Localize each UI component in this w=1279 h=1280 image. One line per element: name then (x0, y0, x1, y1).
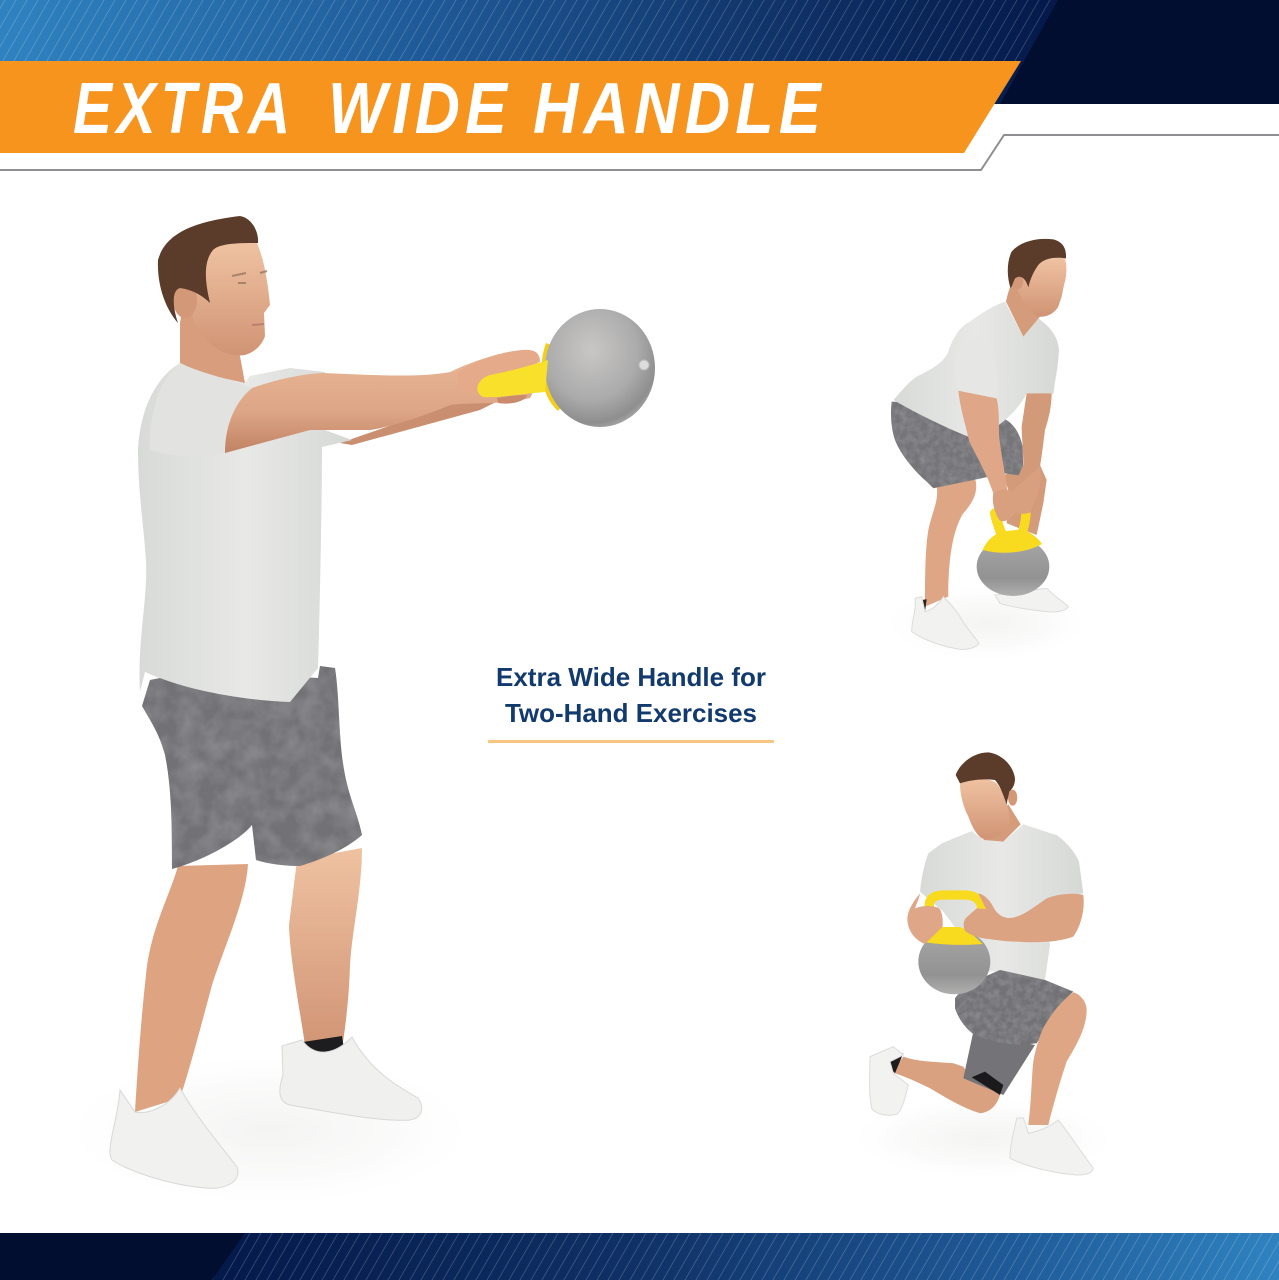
hair (956, 752, 1015, 804)
title: HANDLE (533, 69, 826, 149)
shorts (955, 970, 1073, 1045)
title (73, 69, 826, 149)
shorts (891, 402, 1023, 488)
ear (1008, 790, 1017, 806)
orange title band (0, 61, 1021, 153)
navy header bar (0, 0, 1279, 104)
sock (890, 1053, 903, 1073)
right handle post (1022, 514, 1026, 534)
left handle post (995, 513, 1004, 538)
shorts (142, 666, 362, 869)
gripping fingers (458, 350, 540, 395)
yellow dome (926, 927, 983, 945)
front shoe (912, 597, 979, 649)
photo: man swinging kettlebell (55, 216, 655, 1210)
valve (639, 360, 649, 370)
head (960, 779, 1010, 839)
back leg (895, 1057, 1000, 1113)
back shoe (280, 1037, 422, 1120)
caption line 2: Two-Hand Exercises (505, 698, 757, 728)
yellow dome (983, 529, 1042, 553)
torso shirt (138, 363, 352, 702)
head (190, 243, 270, 355)
kettlebell (477, 309, 655, 427)
lower shorts (963, 1032, 1035, 1095)
photo: squat with kettlebell (880, 239, 1093, 663)
hair (1008, 239, 1066, 288)
floor shadow (55, 1050, 485, 1210)
shirt (920, 824, 1083, 980)
back sock (303, 1036, 345, 1062)
black liner (972, 1072, 1003, 1095)
kettlebell (918, 895, 990, 994)
shirt sleeve (150, 363, 252, 456)
hands (993, 467, 1041, 521)
sock (921, 599, 927, 612)
white gap below bar (0, 104, 1279, 134)
header banner (0, 0, 1279, 170)
caption underline (488, 740, 774, 743)
back arm (340, 398, 500, 445)
front arm (958, 391, 1017, 521)
front shoe (110, 1088, 238, 1188)
ear (173, 282, 197, 318)
back leg (289, 848, 362, 1052)
right arm and hand (964, 893, 1084, 942)
neck (180, 298, 245, 383)
floor shadow (880, 583, 1093, 663)
handle (929, 895, 982, 909)
head (1017, 258, 1066, 317)
back shoe (995, 588, 1068, 612)
neck (1006, 280, 1040, 337)
front leg (925, 478, 976, 607)
back leg (1003, 465, 1047, 535)
front arm (225, 350, 538, 453)
neck (983, 804, 1021, 842)
back shoe (870, 1047, 908, 1115)
front leg (1028, 992, 1087, 1125)
title: WIDE (328, 69, 512, 149)
floor shadow (843, 1095, 1123, 1182)
front leg (135, 864, 248, 1112)
lower fingers (497, 395, 527, 404)
caption line 1: Extra Wide Handle for (496, 662, 766, 692)
left arm and hand (907, 893, 943, 944)
photo: lunge with kettlebell (843, 752, 1123, 1182)
front shoe (1010, 1118, 1093, 1175)
kettlebell (977, 513, 1049, 596)
hair (158, 216, 258, 323)
caption (488, 662, 774, 743)
sleeve (955, 337, 997, 398)
footer band (0, 1233, 1279, 1280)
grey outline rule (0, 135, 1279, 170)
rim (542, 343, 575, 411)
facial features (232, 271, 267, 325)
ball (545, 309, 655, 427)
yellow handle (477, 360, 548, 397)
back arm (1012, 393, 1052, 513)
ball (977, 537, 1049, 596)
ear (1013, 274, 1023, 289)
ball (918, 929, 990, 994)
blue striped band (0, 0, 1058, 104)
title: EXTRA (73, 69, 295, 149)
shirt (893, 302, 1059, 437)
